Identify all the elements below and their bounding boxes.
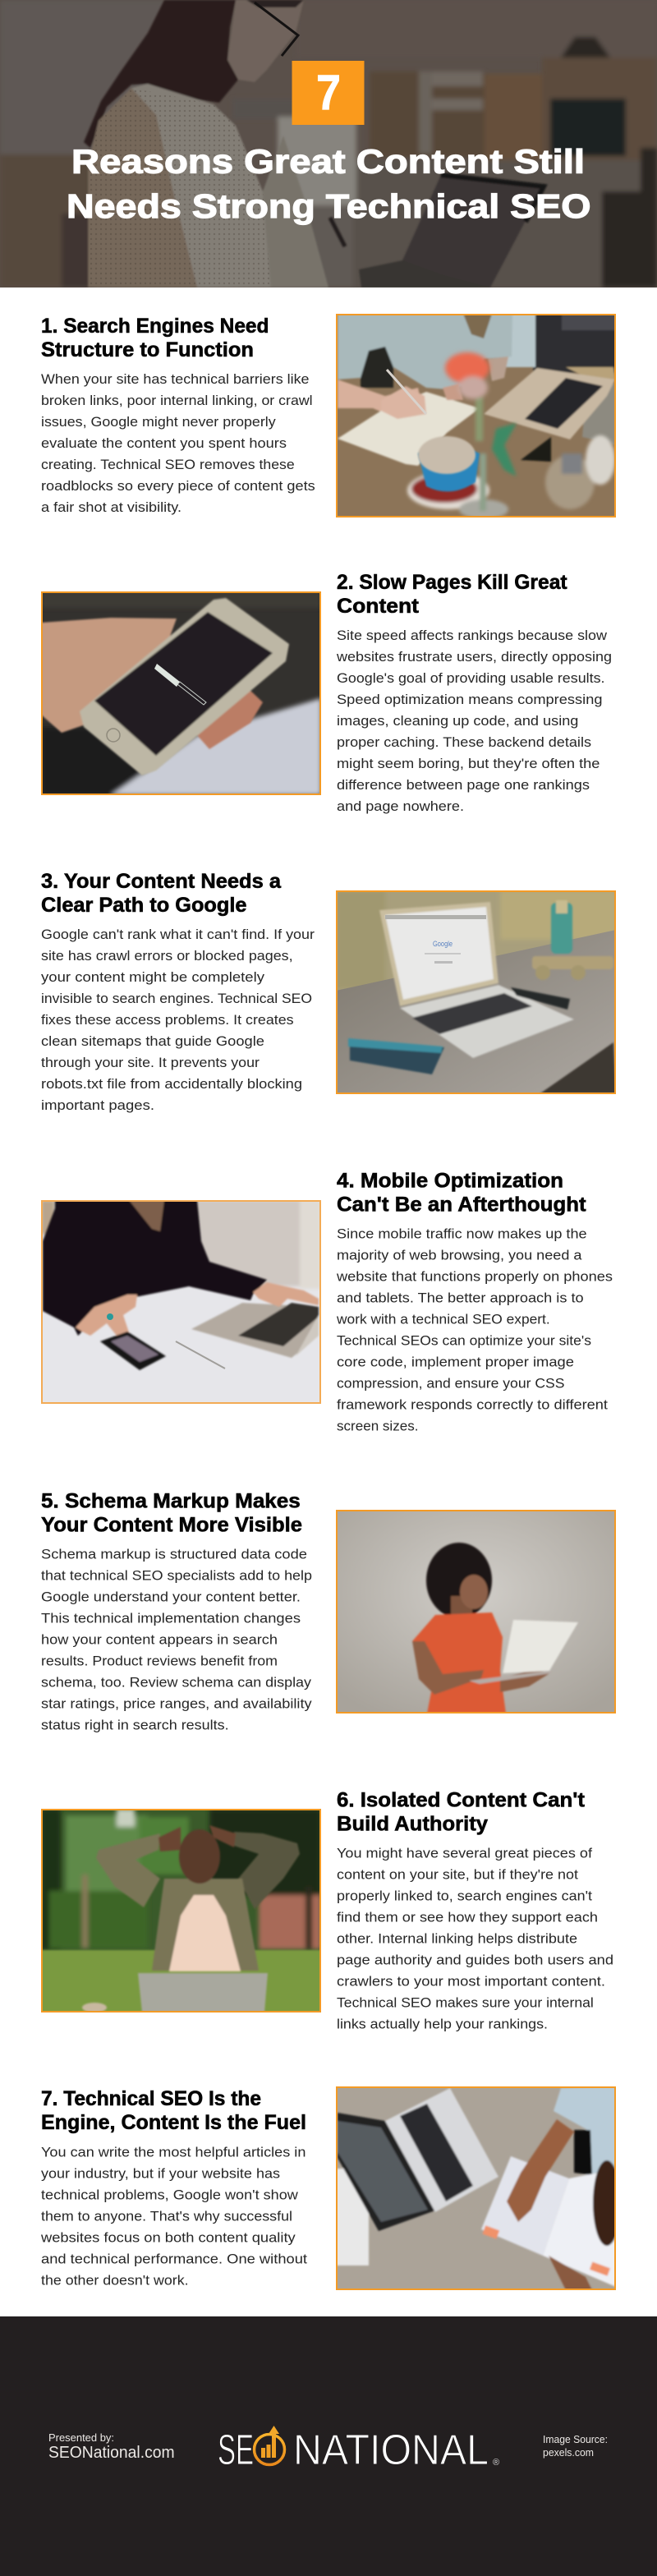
section 6 xyxy=(41,1789,613,2032)
body text 3: fixes these access problems. It creates xyxy=(41,1013,294,1028)
number badge: 7 xyxy=(316,65,341,120)
heading 3 xyxy=(41,870,282,917)
number badge xyxy=(292,61,365,125)
body text 7: your industry, but if your website has xyxy=(41,2167,280,2182)
header banner xyxy=(0,0,657,288)
body text 3: site has crawl errors or blocked pages, xyxy=(41,949,293,964)
body text 1: creating. Technical SEO removes these xyxy=(41,458,295,472)
heading 2: Content xyxy=(337,595,420,618)
body text 1: broken links, poor internal linking, or crawl xyxy=(41,393,313,408)
body text 5: Google understand your content better. xyxy=(41,1590,301,1605)
heading 5: 5. Schema Markup Makes xyxy=(41,1490,301,1513)
section 4 xyxy=(41,1170,613,1434)
body text 3: through your site. It prevents your xyxy=(41,1056,260,1070)
footer panel xyxy=(0,2316,657,2576)
heading 4: Can't Be an Afterthought xyxy=(337,1193,586,1216)
image source credit: Image Source: xyxy=(543,2434,608,2445)
body text 6: Technical SEO makes sure your internal xyxy=(337,1996,594,2011)
body text 6: find them or see how they support each xyxy=(337,1911,598,1925)
body text 2: and page nowhere. xyxy=(337,799,464,814)
hero background photo xyxy=(0,0,657,288)
body text 4: majority of web browsing, you need a xyxy=(337,1249,582,1263)
body text 1: evaluate the content you spent hours xyxy=(41,436,287,451)
body text 2: Site speed affects rankings because slow xyxy=(337,628,607,643)
heading 5 xyxy=(41,1490,302,1536)
body text 1: roadblocks so every piece of content gets xyxy=(41,479,315,494)
body text 7: You can write the most helpful articles in xyxy=(41,2146,306,2160)
body text 3: clean sitemaps that guide Google xyxy=(41,1034,264,1049)
body text 3: invisible to search engines. Technical SEO xyxy=(41,991,312,1006)
body text 2: proper caching. These backend details xyxy=(337,735,591,750)
heading 4: 4. Mobile Optimization xyxy=(337,1170,563,1193)
body text 3: robots.txt file from accidentally blocking xyxy=(41,1077,302,1092)
heading 4 xyxy=(337,1170,586,1216)
body text 4 xyxy=(336,1227,613,1434)
image source credit: pexels.com xyxy=(543,2447,594,2459)
body text 5: status right in search results. xyxy=(41,1718,229,1733)
body text 6: properly linked to, search engines can't xyxy=(337,1889,592,1904)
body text 5 xyxy=(41,1548,312,1733)
body text 6: page authority and guides both users and xyxy=(337,1953,613,1968)
image: woman in red top with laptop xyxy=(336,1510,616,1714)
body text 4: and tablets. The better approach is to xyxy=(337,1291,584,1306)
body text 7: websites focus on both content quality xyxy=(40,2231,296,2246)
body text 5: This technical implementation changes xyxy=(41,1612,301,1626)
body text 4: framework responds correctly to different xyxy=(337,1398,608,1413)
body text 3: your content might be completely xyxy=(41,970,265,985)
body text 2: Speed optimization means compressing xyxy=(337,692,603,707)
heading 7: Engine, Content Is the Fuel xyxy=(41,2111,306,2134)
body text 2 xyxy=(336,628,612,814)
body text 4: work with a technical SEO expert. xyxy=(336,1313,550,1327)
body text 2: websites frustrate users, directly opposing xyxy=(336,650,612,665)
body text 4: core code, implement proper image xyxy=(337,1355,574,1370)
image: stressed man in park with laptop xyxy=(41,1809,321,2012)
body text 4: Since mobile traffic now makes up the xyxy=(337,1227,587,1242)
section 3 xyxy=(41,870,616,1113)
body text 1: issues, Google might never properly xyxy=(41,415,276,430)
section 7 xyxy=(40,2086,621,2290)
presented by credit: SEONational.com xyxy=(48,2444,175,2462)
body text 2: images, cleaning up code, and using xyxy=(337,714,578,729)
image: overhead desk with laptop and notebook xyxy=(336,2086,621,2290)
image: laptop showing Google xyxy=(336,890,616,1094)
body text 6 xyxy=(337,1847,613,2032)
main title xyxy=(67,143,591,225)
heading 2: 2. Slow Pages Kill Great xyxy=(337,571,567,594)
body text 1: When your site has technical barriers like xyxy=(41,372,309,387)
body text 5: how your content appears in search xyxy=(41,1633,278,1648)
main title: Reasons Great Content Still xyxy=(71,143,585,181)
section 1 xyxy=(41,314,616,519)
icon: ring with bars and arrow xyxy=(255,2426,284,2464)
heading 1: 1. Search Engines Need xyxy=(41,315,269,338)
heading 2 xyxy=(337,571,567,618)
logo: SEO National: ® xyxy=(493,2458,499,2468)
body text 4: website that functions properly on phones xyxy=(336,1270,613,1285)
logo: SEO National: SE xyxy=(218,2426,254,2474)
image: person writing at cafe table xyxy=(336,314,616,519)
image source credit xyxy=(543,2434,608,2459)
body text 2: might seem boring, but they're often the xyxy=(337,757,600,771)
body text 5: that technical SEO specialists add to help xyxy=(41,1569,312,1584)
heading 1 xyxy=(41,315,269,361)
heading 7 xyxy=(41,2087,306,2134)
logo: SEO National: NATIONAL xyxy=(293,2426,489,2474)
heading 6: Build Authority xyxy=(337,1812,488,1835)
heading 6 xyxy=(337,1789,586,1835)
section 2 xyxy=(41,571,612,814)
body text 6: content on your site, but if they're not xyxy=(337,1868,578,1883)
body text 3: Google can't rank what it can't find. If your xyxy=(41,927,315,942)
body text 6: links actually help your rankings. xyxy=(337,2017,548,2032)
presented by credit: Presented by: xyxy=(48,2431,114,2444)
body text 3: important pages. xyxy=(41,1098,154,1113)
body text 4: screen sizes. xyxy=(337,1419,419,1434)
heading 5: Your Content More Visible xyxy=(41,1513,302,1536)
body text 7: them to anyone. That's why successful xyxy=(41,2210,292,2224)
body text 6: You might have several great pieces of xyxy=(337,1847,592,1861)
body text 6: crawlers to your most important content. xyxy=(337,1975,605,1990)
body text 7: technical problems, Google won't show xyxy=(41,2188,298,2203)
heading 6: 6. Isolated Content Can't xyxy=(337,1789,586,1812)
body text 4: Technical SEOs can optimize your site's xyxy=(337,1334,591,1349)
body text 4: compression, and ensure your CSS xyxy=(337,1377,565,1392)
body text 2: difference between page one rankings xyxy=(337,778,590,793)
heading 1: Structure to Function xyxy=(41,338,254,361)
heading 3: Clear Path to Google xyxy=(41,894,247,917)
image: laptop showing Google: Google xyxy=(433,940,453,948)
body text 1 xyxy=(41,372,315,515)
body text 5: results. Product reviews benefit from xyxy=(41,1654,278,1669)
body text 5: star ratings, price ranges, and availability xyxy=(41,1697,312,1712)
presented by credit xyxy=(48,2431,175,2462)
image: hand holding loading phone xyxy=(41,591,321,795)
body text 5: schema, too. Review schema can display xyxy=(41,1676,312,1690)
body text 2: Google's goal of providing usable results. xyxy=(337,671,604,686)
heading 3: 3. Your Content Needs a xyxy=(41,870,282,893)
body text 3 xyxy=(41,927,315,1113)
body text 7: the other doesn't work. xyxy=(41,2274,189,2288)
heading 7: 7. Technical SEO Is the xyxy=(41,2087,261,2110)
body text 5: Schema markup is structured data code xyxy=(41,1548,307,1562)
main title: Needs Strong Technical SEO xyxy=(67,187,591,225)
body text 7: and technical performance. One without xyxy=(41,2252,307,2267)
body text 6: other. Internal linking helps distribute xyxy=(337,1932,577,1947)
image: woman using phone and laptop xyxy=(41,1200,321,1404)
body text 7 xyxy=(40,2146,307,2288)
body text 1: a fair shot at visibility. xyxy=(41,500,181,515)
section 5 xyxy=(41,1490,616,1733)
